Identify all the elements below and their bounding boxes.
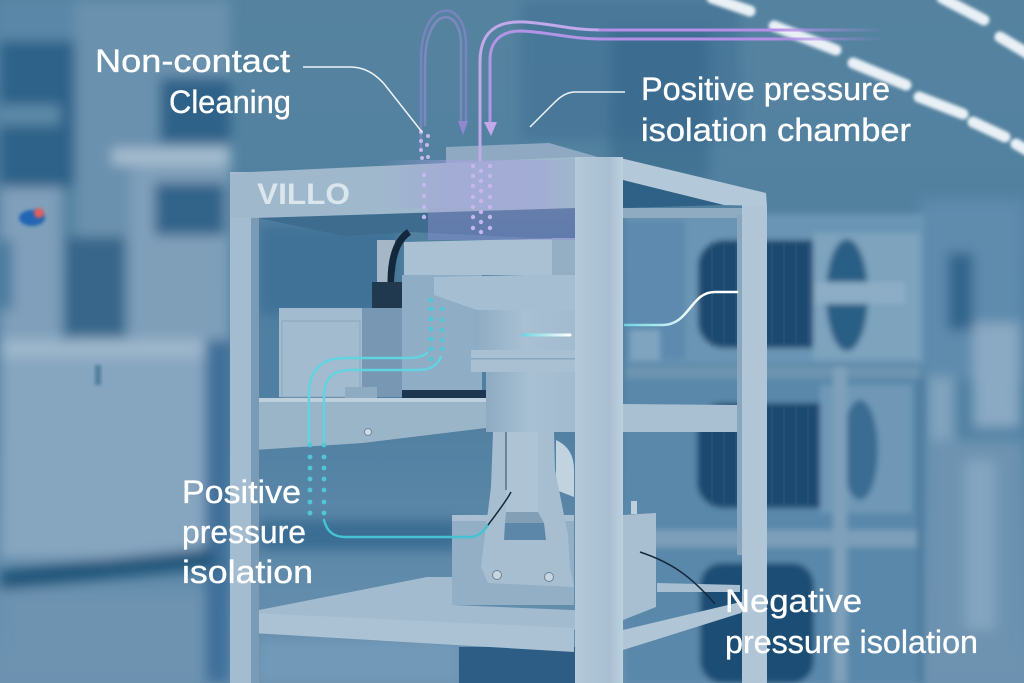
label: Positive pressure isolation: pressure <box>182 514 306 550</box>
leader lines <box>303 67 715 604</box>
arrows: purple airflow <box>421 11 885 160</box>
label: Negative pressure isolation: Negative <box>725 583 862 619</box>
lower box <box>452 515 574 605</box>
label: Negative pressure isolation <box>725 583 978 660</box>
center block <box>402 275 482 390</box>
brand mark: VILLO <box>257 178 350 211</box>
head plate <box>404 238 575 275</box>
dotted airflow: cyan <box>308 298 444 515</box>
wedge <box>434 274 575 310</box>
label: Positive pressure isolation <box>182 474 313 590</box>
left box <box>279 308 362 397</box>
label: Negative pressure isolation: pressure isolation <box>725 624 978 660</box>
arrows: cyan isolation flow <box>309 292 737 537</box>
label: Positive pressure isolation: Positive <box>182 474 301 510</box>
underside of top frame <box>258 208 575 240</box>
label: Positive pressure isolation: isolation <box>182 554 313 590</box>
frame top beam <box>230 157 575 218</box>
gripper <box>481 432 574 587</box>
motor <box>377 240 395 282</box>
ceiling lights <box>712 0 1024 152</box>
label: Positive pressure isolation chamber <box>641 71 911 148</box>
bottom shelf front <box>252 613 574 652</box>
panel below the shelf <box>459 647 575 683</box>
label: Non-contact Cleaning: Cleaning <box>169 84 291 120</box>
back tray <box>259 577 620 630</box>
label: Non-contact Cleaning: Non-contact <box>95 43 290 79</box>
transparent isolation chamber <box>428 208 575 240</box>
background: wafer racks <box>625 214 925 683</box>
round tube <box>556 440 574 497</box>
label: Non-contact Cleaning <box>95 43 291 120</box>
frame posts <box>230 172 251 683</box>
mid arm <box>254 400 486 450</box>
label: Positive pressure isolation chamber: Positive pressure <box>641 71 890 107</box>
chamber top <box>446 143 598 165</box>
label: Positive pressure isolation chamber: isolation chamber <box>641 112 911 148</box>
machine <box>230 143 767 683</box>
rotary cylinder <box>474 310 575 350</box>
dotted airflow: chamber <box>419 130 492 234</box>
